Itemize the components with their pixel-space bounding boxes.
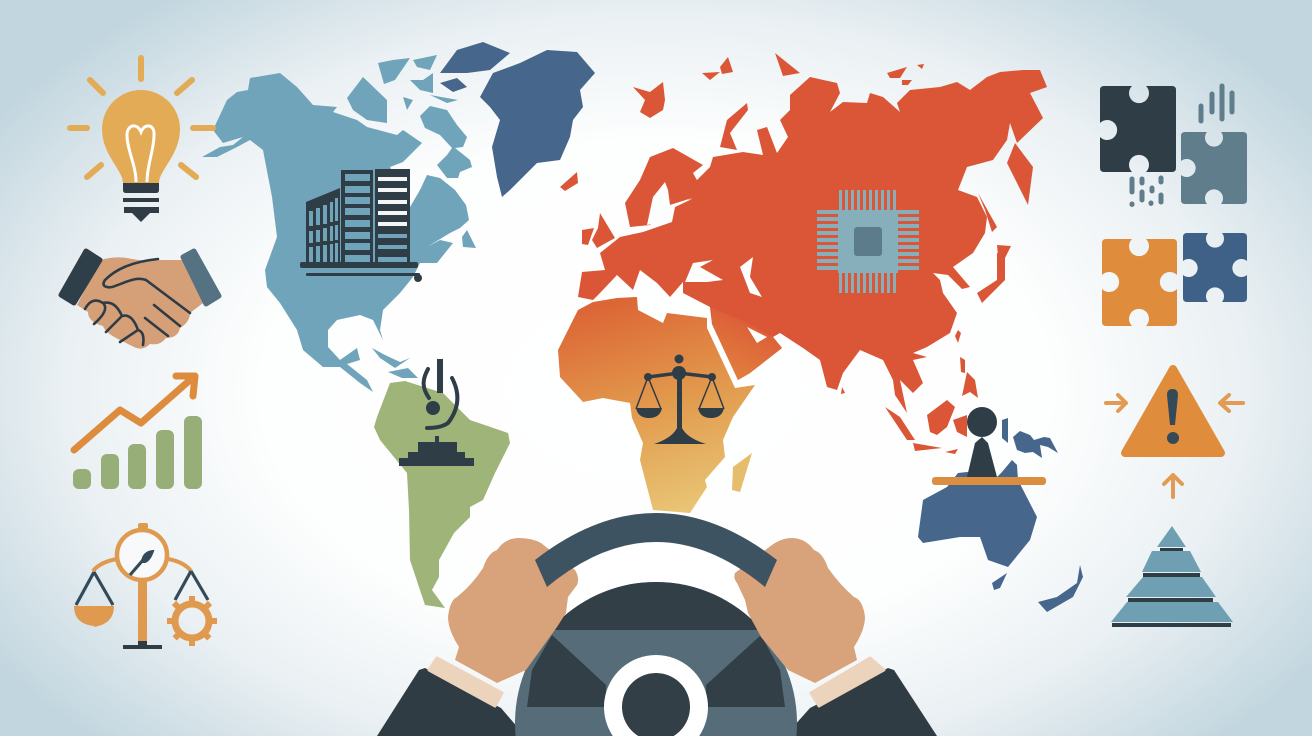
world map — [202, 42, 1083, 612]
south america — [374, 381, 510, 608]
icon: puzzle pieces — [1100, 86, 1247, 326]
arabia — [712, 308, 782, 380]
wheel rim — [535, 513, 777, 587]
puzzle: orange piece — [1102, 239, 1177, 326]
puzzle: dark piece — [1100, 86, 1176, 172]
icon: steering wheel and hands — [377, 513, 937, 736]
icon: person at podium — [932, 407, 1046, 485]
cuffs — [429, 658, 884, 706]
greenland and arctic islands — [440, 42, 595, 197]
icon: microchip — [817, 190, 919, 293]
icon: tiered pyramid — [1111, 526, 1233, 627]
australia and oceania — [918, 418, 1083, 612]
puzzle: grey piece — [1181, 132, 1247, 204]
eurasia — [560, 53, 1047, 454]
wheel hub — [515, 582, 797, 736]
icon: warning triangle with arrows — [1106, 369, 1243, 497]
icon: balance with gauge and gear — [74, 523, 217, 649]
persian gulf — [747, 327, 767, 343]
madagascar — [732, 453, 752, 492]
wheel opening — [545, 542, 767, 640]
icon: handshake — [61, 251, 219, 349]
icon: office building — [300, 169, 422, 282]
icon: lightbulb — [70, 58, 213, 222]
suit sleeves — [377, 668, 937, 736]
puzzle: blue piece — [1183, 233, 1247, 302]
inland seas — [647, 182, 762, 297]
icon: microscope — [399, 359, 474, 466]
africa — [558, 297, 755, 513]
north america — [202, 55, 476, 392]
icon: scales of justice — [636, 354, 724, 444]
hands — [448, 538, 865, 683]
signal marks — [1132, 86, 1232, 204]
icon: growth chart — [73, 376, 202, 489]
